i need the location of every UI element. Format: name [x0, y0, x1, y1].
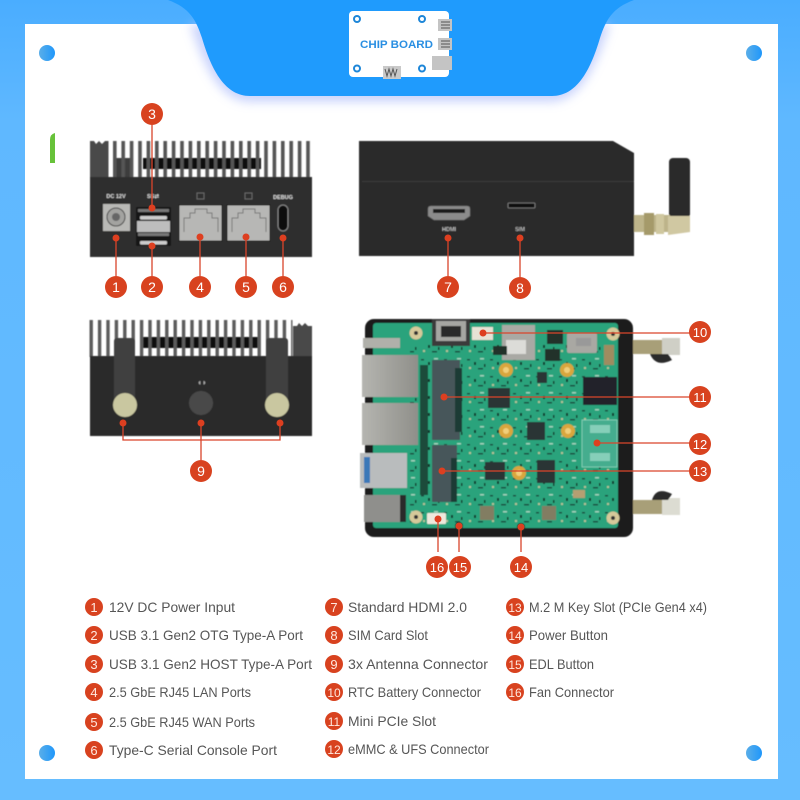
header tab: [168, 0, 634, 96]
badge 13: 13: [693, 464, 707, 479]
badge 2: [141, 276, 163, 298]
small dark chips top: [493, 330, 614, 365]
m.2 slot: [432, 445, 457, 502]
badge 13: [689, 460, 711, 482]
main chips: [485, 372, 555, 483]
badge 4: [189, 276, 211, 298]
legend item 10: RTC Battery Connector: [348, 684, 481, 700]
legend item 9: 3x Antenna Connector: [348, 656, 488, 672]
power inductors: [480, 490, 585, 520]
badge 6: [272, 276, 294, 298]
device body side: [359, 141, 634, 256]
badge 7: [437, 276, 459, 298]
badge 8: 8: [516, 280, 524, 296]
rj45 port wan: [227, 205, 270, 241]
port labels: SS⇄: [147, 192, 159, 200]
fan connector: [427, 513, 446, 524]
callout lines side: [444, 234, 524, 277]
legend item 7: Standard HDMI 2.0: [348, 599, 467, 615]
legend item 11: 11: [328, 715, 341, 729]
green edge mark: [50, 133, 55, 163]
legend item 2: 2: [90, 628, 98, 643]
usb jack: [360, 453, 407, 488]
corner mounting holes: [410, 326, 620, 524]
legend item 15: [506, 655, 594, 673]
antenna connector bottom: [630, 491, 680, 515]
badge 3: 3: [148, 106, 156, 122]
port labels: DC 12V: [106, 194, 126, 200]
legend item 9: 9: [330, 657, 338, 672]
legend item 2: USB 3.1 Gen2 OTG Type-A Port: [109, 627, 303, 643]
emmc ufs connector: [582, 420, 617, 467]
port labels: [106, 192, 293, 201]
badge 1: 1: [112, 279, 120, 295]
badge 8: [509, 277, 531, 299]
legend item 1: 1: [90, 600, 98, 615]
panel: side view: [359, 141, 690, 299]
logo: chip board: CHIP BOARD: [360, 39, 433, 51]
legend item 12: eMMC & UFS Connector: [348, 741, 489, 757]
legend item 15: 15: [508, 658, 522, 672]
legend item 8: [325, 626, 428, 644]
ethernet jack 1: [362, 355, 418, 397]
badge 1: [105, 276, 127, 298]
device body front: [90, 356, 312, 436]
legend item 15: EDL Button: [529, 656, 594, 672]
badge 16: [426, 556, 448, 578]
legend item 6: Type-C Serial Console Port: [109, 742, 277, 758]
legend item 4: 2.5 GbE RJ45 LAN Ports: [109, 684, 251, 700]
legend item 7: 7: [330, 600, 338, 615]
badge 11: [689, 386, 711, 408]
badge 10: 10: [693, 325, 707, 340]
badge 9: [190, 460, 212, 482]
gold standoffs: [499, 363, 575, 480]
hdmi port: [428, 206, 470, 220]
antenna connector top: [630, 338, 680, 363]
legend item 14: Power Button: [529, 627, 608, 643]
badge 14: [510, 556, 532, 578]
dc jack: [103, 204, 130, 231]
side labels: [442, 227, 525, 233]
green pcb: [373, 323, 618, 528]
side labels: HDMI: [442, 227, 456, 233]
legend item 3: USB 3.1 Gen2 HOST Type-A Port: [109, 656, 312, 672]
rtc socket: [472, 327, 493, 340]
legend item 8: SIM Card Slot: [348, 627, 428, 643]
corner dot: bottom right: [746, 745, 762, 761]
centre antenna: [189, 378, 213, 415]
centre antenna: ◖◗: [197, 378, 207, 387]
badge 4: 4: [196, 279, 204, 295]
dark rail: [420, 365, 428, 495]
flash chip: [583, 377, 617, 405]
badge 3: [141, 103, 163, 125]
sim holder: [502, 325, 535, 360]
badge 12: [689, 433, 711, 455]
left antenna: [113, 338, 137, 417]
badge 5: [235, 276, 257, 298]
legend item 12: 12: [327, 743, 341, 757]
badge 11: 11: [693, 390, 707, 405]
panel: antenna view: [90, 320, 312, 482]
badge 6: 6: [279, 279, 287, 295]
badge 2: 2: [148, 279, 156, 295]
legend item 1: 12V DC Power Input: [109, 599, 235, 615]
legend item 14: 14: [508, 629, 522, 643]
badge 10: [689, 321, 711, 343]
sim slot: [508, 203, 535, 208]
badge 9: 9: [197, 463, 205, 479]
buttons: [455, 522, 525, 531]
legend item 16: 16: [508, 686, 522, 700]
crystal: [363, 338, 400, 348]
legend: column 1: [85, 598, 312, 759]
corner dot: top right: [746, 45, 762, 61]
side labels: SIM: [515, 227, 525, 233]
metal case: [365, 319, 633, 537]
badge 12: 12: [693, 437, 707, 452]
mini pcie slot: [432, 360, 462, 440]
right antenna: [265, 338, 289, 417]
legend item 3: 3: [90, 657, 98, 672]
legend item 5: 5: [90, 715, 98, 730]
callout lines board: [434, 330, 690, 552]
legend: column 3: [506, 598, 707, 701]
legend item 10: 10: [327, 686, 341, 700]
device body rear: [90, 177, 312, 257]
legend item 16: [506, 683, 614, 701]
usb ports: [136, 207, 171, 246]
legend item 6: 6: [90, 743, 98, 758]
type-c port: [278, 205, 288, 231]
legend: column 2: [325, 598, 489, 758]
callout lines rear: [112, 125, 286, 276]
legend item 4: 4: [90, 685, 98, 700]
port labels: DEBUG: [273, 195, 293, 201]
heat sink fins rear: [90, 141, 312, 178]
badge 15: [449, 556, 471, 578]
connector black: [400, 495, 406, 522]
panel: circuit board: [360, 319, 711, 578]
legend item 11: Mini PCIe Slot: [348, 713, 436, 729]
legend item 8: 8: [330, 628, 338, 643]
legend item 13: M.2 M Key Slot (PCIe Gen4 x4): [529, 599, 707, 615]
heat sink fins front: [90, 320, 312, 357]
panel: rear ports view: [90, 103, 312, 298]
rj45 port lan: [179, 205, 222, 241]
hdmi connector: [432, 319, 470, 346]
badge 7: 7: [444, 279, 452, 295]
antenna: [634, 158, 690, 235]
ethernet jack 2: [362, 403, 418, 445]
corner dot: top left: [39, 45, 55, 61]
badge 14: 14: [514, 560, 528, 575]
badge 15: 15: [453, 560, 467, 575]
legend item 5: 2.5 GbE RJ45 WAN Ports: [109, 714, 255, 730]
badge 16: 16: [430, 560, 444, 575]
badge 5: 5: [242, 279, 250, 295]
legend item 16: Fan Connector: [529, 684, 614, 700]
pcb component texture: [410, 345, 615, 525]
header tab shadow: [190, 24, 610, 102]
dc jack: [364, 495, 400, 522]
legend item 13: 13: [508, 601, 522, 615]
logo: chip board: [349, 11, 452, 79]
callout bracket: [120, 420, 284, 460]
legend item 14: [506, 626, 608, 644]
corner dot: bottom left: [39, 745, 55, 761]
inductor: [567, 333, 597, 353]
